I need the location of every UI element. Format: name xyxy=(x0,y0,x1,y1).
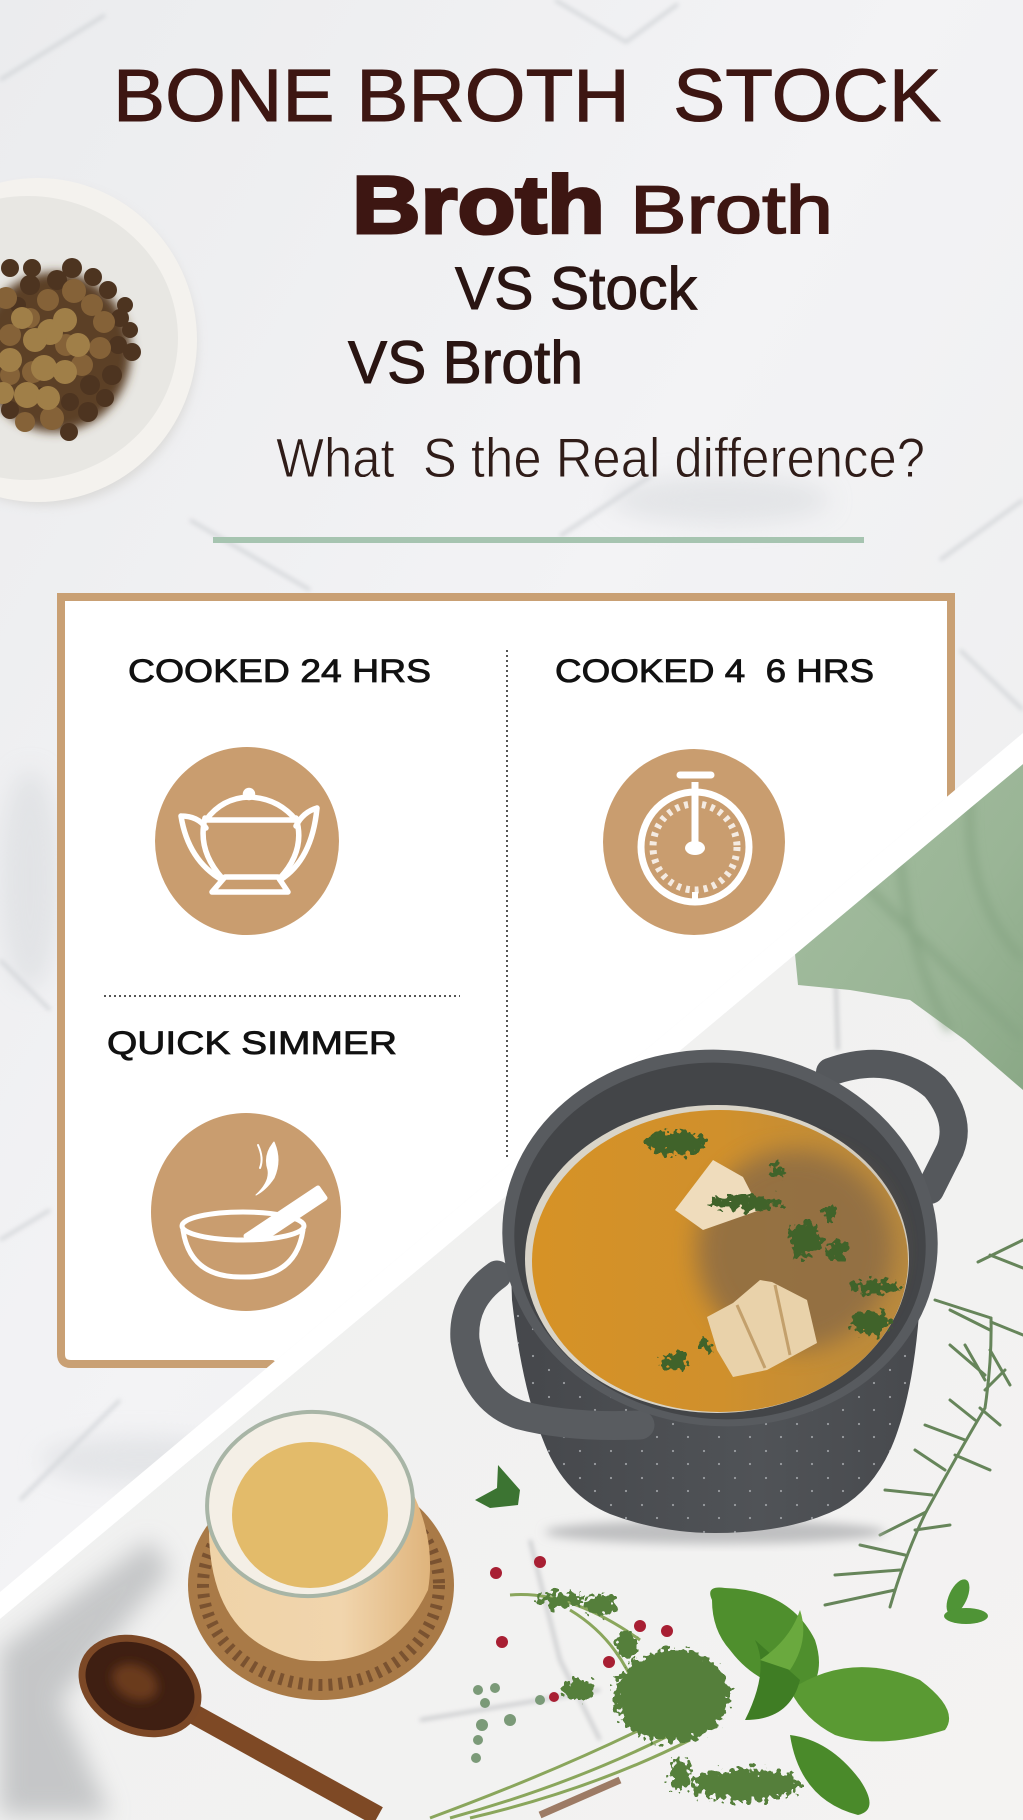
small green leaves xyxy=(944,1579,988,1624)
wooden spoon xyxy=(78,1634,383,1820)
heading: bold broth: Broth xyxy=(352,160,605,251)
label: cooked 4 6 hrs: COOKED 4 6 HRS xyxy=(555,653,874,689)
icon: pot xyxy=(155,747,339,935)
pot shadow xyxy=(545,1520,885,1544)
panel: comparison card xyxy=(60,596,951,1364)
peppercorn shadow xyxy=(0,272,131,432)
towel xyxy=(795,764,1023,1090)
coaster xyxy=(188,1506,454,1700)
photo: lower food scene xyxy=(0,764,1023,1820)
pot of broth xyxy=(465,1028,956,1544)
subtitle: real difference: What S the Real difference? xyxy=(276,426,925,489)
pot handle left xyxy=(465,1275,640,1426)
broth pieces xyxy=(675,1160,817,1377)
heading: vs stock: VS Stock xyxy=(455,255,698,322)
divider: green rule xyxy=(213,537,864,543)
icon: simmering bowl xyxy=(151,1113,341,1311)
herb garnish xyxy=(645,1131,899,1371)
marble vein xyxy=(0,1540,170,1815)
small mint leaf xyxy=(475,1465,520,1508)
label: quick simmer: QUICK SIMMER xyxy=(107,1025,397,1061)
pot handle right xyxy=(830,1064,954,1190)
photo: pepper bowl xyxy=(0,178,197,506)
pot rim xyxy=(484,1028,956,1448)
diagonal white band xyxy=(0,733,1023,1619)
pot body xyxy=(510,1240,925,1533)
red peppercorns xyxy=(490,1556,673,1702)
green capers xyxy=(471,1683,545,1763)
rosemary sprigs xyxy=(825,1240,1023,1607)
jar of broth xyxy=(199,1403,430,1661)
basil leaves xyxy=(710,1588,949,1815)
label: cooked 24 hrs: COOKED 24 HRS xyxy=(128,653,431,689)
peppercorns xyxy=(0,258,141,441)
heading: regular broth: Broth xyxy=(630,172,833,248)
heading: vs broth: VS Broth xyxy=(348,329,583,396)
thyme and parsley bunch xyxy=(430,1592,800,1818)
title: bone broth stock: BONE BROTH STOCK xyxy=(113,54,941,137)
icon: pocket clock xyxy=(603,749,785,935)
soup surface xyxy=(532,1110,908,1412)
